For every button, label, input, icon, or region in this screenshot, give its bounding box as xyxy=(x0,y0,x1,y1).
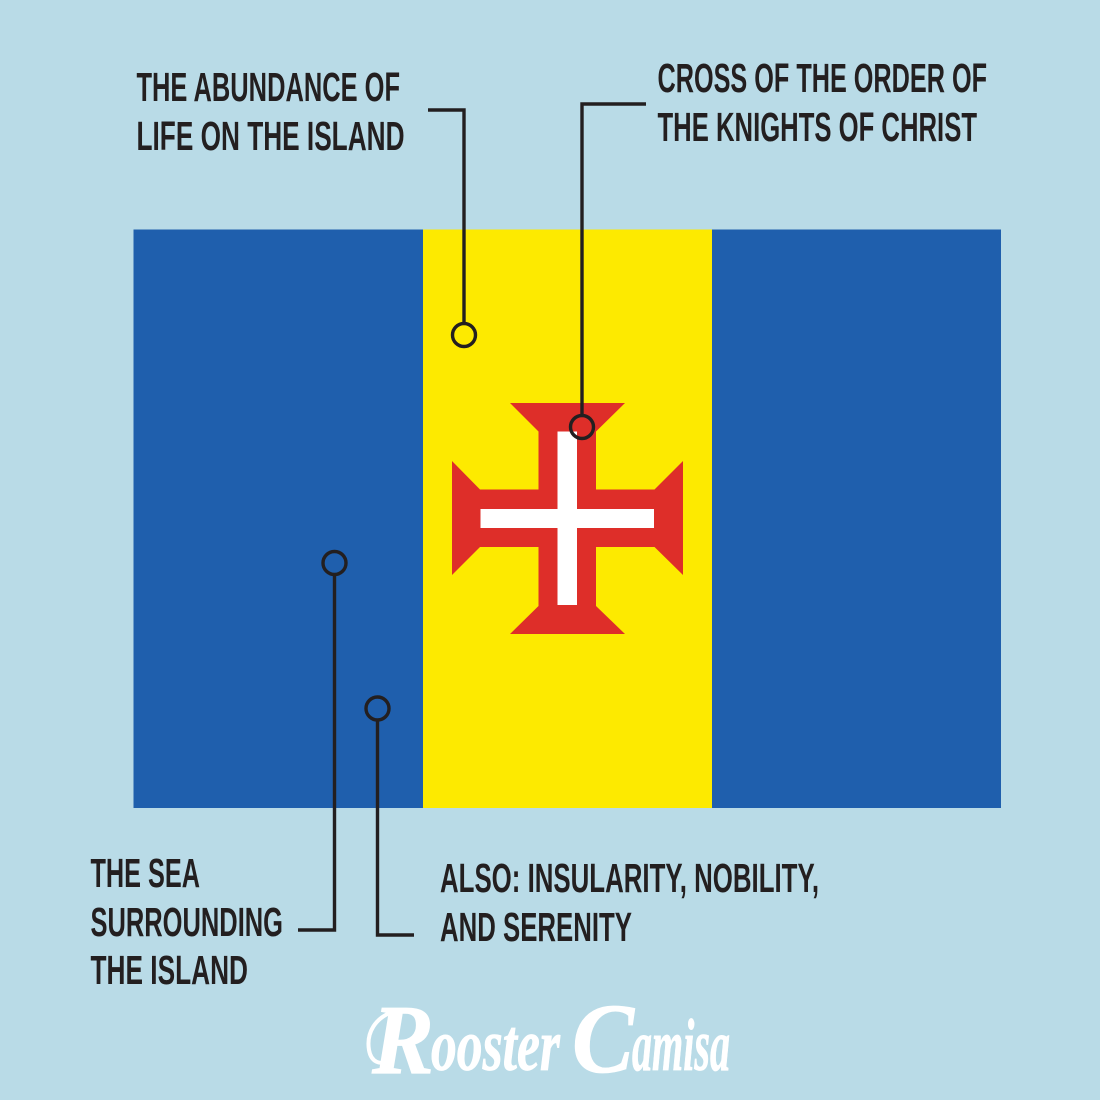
marker circle xyxy=(452,324,476,346)
label text xyxy=(440,855,819,950)
central yellow band xyxy=(423,230,712,808)
flag of Madeira xyxy=(134,230,1001,808)
callout: the abundance of life xyxy=(136,64,476,346)
label text xyxy=(136,64,404,159)
label text: ALSO: INSULARITY, NOBILITY, xyxy=(440,855,819,901)
label text: LIFE ON THE ISLAND xyxy=(136,113,404,159)
label text: THE ISLAND xyxy=(90,947,248,993)
logo: Rooster Camisa xyxy=(368,983,730,1095)
logo wordmark xyxy=(371,983,730,1095)
leader line xyxy=(582,104,646,415)
leader line xyxy=(378,720,414,935)
marker circle xyxy=(570,416,594,438)
white inner cross xyxy=(480,432,654,605)
label text: THE SEA xyxy=(90,850,200,896)
logo wordmark: C xyxy=(572,983,635,1094)
logo swashes xyxy=(368,1012,392,1063)
label text xyxy=(658,55,987,150)
label text: AND SERENITY xyxy=(440,904,632,950)
logo wordmark: amisa xyxy=(632,1005,730,1087)
right blue band xyxy=(712,230,1001,808)
label text xyxy=(90,850,283,993)
callout: insularity, nobility, serenity xyxy=(366,697,819,950)
left blue band xyxy=(134,230,423,808)
callout: cross of the order xyxy=(570,55,987,438)
marker circle xyxy=(366,697,389,720)
callout: the sea surrounding the island xyxy=(90,552,346,993)
red cross xyxy=(452,403,683,634)
icon: cross of the Order of Christ xyxy=(452,403,683,634)
logo wordmark: R xyxy=(371,984,434,1095)
label text: THE ABUNDANCE OF xyxy=(136,64,400,110)
leader line xyxy=(298,574,334,930)
leader line xyxy=(428,110,464,323)
marker circle xyxy=(323,552,346,574)
label text: SURROUNDING xyxy=(90,899,283,945)
logo wordmark: ooster xyxy=(431,1005,561,1087)
